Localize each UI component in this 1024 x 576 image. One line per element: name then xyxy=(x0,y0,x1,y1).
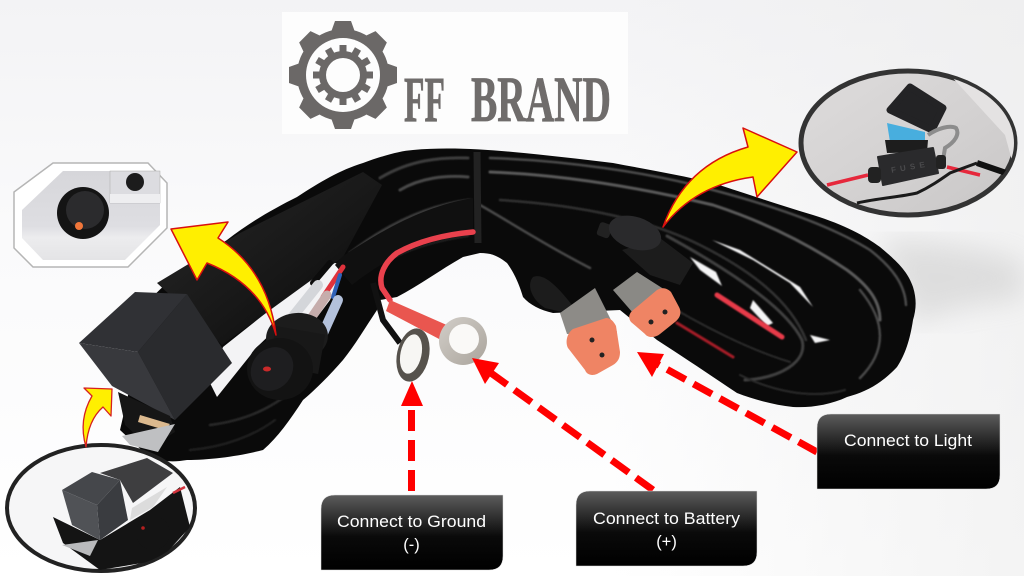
logo: Off Brand xyxy=(282,12,628,136)
spade connectors and wires xyxy=(290,263,343,340)
tie strap at centre xyxy=(477,152,478,243)
switch inset panel xyxy=(14,163,167,267)
white gap behind switch xyxy=(210,262,345,397)
black sleeve xyxy=(157,172,382,345)
arrow: dashed to battery terminal xyxy=(472,358,653,490)
fuse cap xyxy=(890,87,943,130)
arrow: dashed to ground terminal xyxy=(401,381,423,491)
icon: gear xyxy=(289,21,397,129)
white gaps between cables xyxy=(690,240,830,343)
logo wordmark: BRAND xyxy=(471,64,611,136)
inset wires xyxy=(173,487,185,493)
callout: connect to ground: Connect to Ground xyxy=(337,513,486,531)
mini inset photo xyxy=(110,171,160,203)
callout: connect to light xyxy=(817,414,1000,489)
inset relay xyxy=(62,472,128,556)
callout: connect to battery: Connect to Battery xyxy=(593,510,741,528)
arrow: dashed to light connector xyxy=(637,352,817,452)
arrow: small yellow to relay xyxy=(83,388,112,447)
logo wordmark: FF xyxy=(404,64,445,136)
lower DT connector boot xyxy=(530,276,572,312)
inline fuse pod xyxy=(596,209,693,285)
inset harness loops xyxy=(53,487,190,570)
cap tether xyxy=(928,127,957,160)
inset white gap xyxy=(130,487,167,520)
harness cable mass xyxy=(120,149,916,461)
lower sleeve tube xyxy=(335,198,473,285)
arrow: yellow to switch inset xyxy=(171,222,276,335)
cable highlights xyxy=(190,158,906,450)
fuse holder xyxy=(868,140,946,185)
fuse holder: FUSE xyxy=(890,160,926,175)
fuse wires xyxy=(827,163,1012,203)
arrow: yellow to fuse inset xyxy=(663,128,797,227)
blue fuse blade xyxy=(887,123,925,140)
harness drop shadow xyxy=(880,240,1024,325)
black ground wire and ring terminal xyxy=(373,283,434,385)
lower DT connector xyxy=(560,288,620,375)
red power wires xyxy=(677,295,782,357)
inset switch xyxy=(141,526,145,530)
fuse inset ellipse xyxy=(801,71,1020,215)
inset sleeve xyxy=(100,458,173,503)
rocker switch xyxy=(242,310,330,400)
relay xyxy=(79,292,232,452)
switch close-up xyxy=(57,187,109,239)
callout: connect to ground xyxy=(321,495,503,570)
callout: connect to ground: (-) xyxy=(403,536,420,554)
light wall strip xyxy=(954,79,1014,158)
callout: connect to battery xyxy=(576,491,757,566)
callout: connect to light: Connect to Light xyxy=(844,432,972,450)
wiring harness xyxy=(120,149,916,461)
red battery wire and ring terminal xyxy=(381,232,487,365)
relay inset ellipse xyxy=(7,445,195,571)
callout: connect to battery: (+) xyxy=(656,533,677,551)
logo wordmark xyxy=(404,64,611,136)
upper DT connector xyxy=(613,272,680,337)
